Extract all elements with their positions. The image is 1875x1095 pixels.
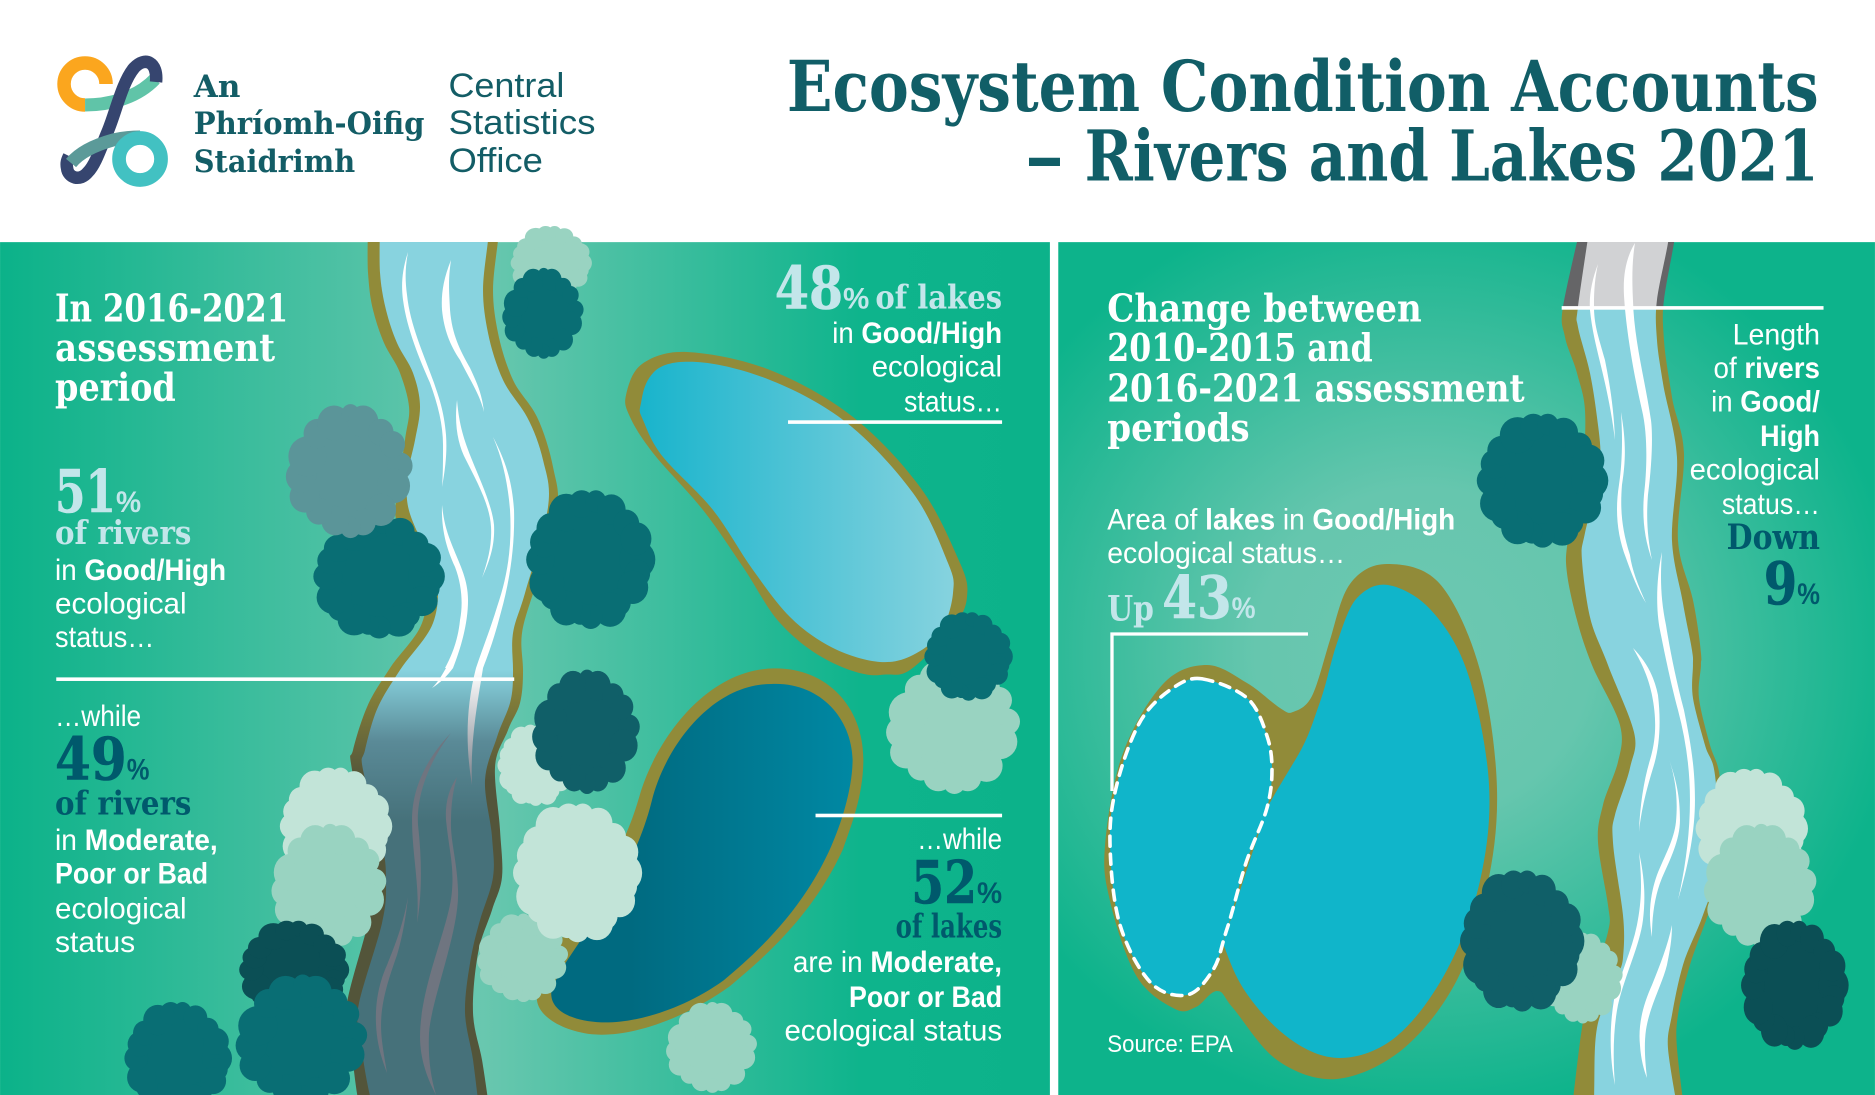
stat: rivers 49%: of rivers [55,784,191,822]
stat: lakes 48%: in Good/High [832,317,1002,350]
stat: rivers down 9%: 9 [1764,549,1797,618]
panel background [0,242,1050,1095]
stat: rivers down 9% [1690,318,1821,618]
stat: lakes 48%: ecological [872,351,1002,384]
river [1562,225,1725,1095]
panel background [1058,242,1875,1095]
stat: rivers 51%: 51 [55,457,116,526]
stat: rivers 49%: …while [55,700,141,733]
stat: lakes 52%: % [977,877,1002,910]
stat: rivers down 9%: Down [1727,517,1820,558]
trees [124,226,1020,1095]
stat: rivers down 9%: Length [1733,318,1820,351]
divider: lakes bottom [816,814,1002,817]
stat: lakes 48%: % [843,282,869,315]
source note: Source: EPA [1107,1031,1233,1058]
stat: rivers down 9%: of rivers [1714,352,1820,385]
heading: assessment period [55,287,288,411]
stat: rivers 51%: in Good/High [55,554,226,587]
stat: lakes up 43%: 43 [1162,563,1232,632]
heading: change between periods: 2010-2015 and [1107,326,1373,371]
stat: lakes up 43%: ecological status… [1107,537,1345,570]
stat: rivers 49%: ecological [55,892,187,925]
heading: change between periods: Change between [1107,287,1422,332]
stat: lakes 48% [775,253,1002,418]
logo: English name [448,67,596,180]
stat: rivers 49%: Poor or Bad [55,858,208,891]
stat: lakes 48%: status… [904,385,1002,418]
stat: lakes up 43% [1107,504,1455,632]
stat: rivers 49%: in Moderate, [55,824,218,857]
stat: lakes 52%: 52 [911,848,977,917]
stat: rivers 51%: of rivers [55,514,191,552]
lake: moderate/poor/bad status [537,668,863,1035]
lake bank [1104,564,1497,1079]
stat: rivers down 9%: status… [1722,488,1820,521]
trees [1460,414,1849,1050]
stat: rivers 51%: ecological [55,587,187,620]
stat: lakes up 43%: Up [1107,589,1154,630]
heading: assessment period: In 2016-2021 [55,287,288,332]
stat: rivers down 9%: High [1760,420,1820,453]
heading: change between periods: 2016-2021 assessment [1107,367,1525,412]
stat: rivers 51%: % [116,486,141,519]
divider: lakes top [788,420,1002,424]
stat: rivers 51% [55,457,226,654]
logo: Irish name: Phríomh-Oifig [194,106,425,142]
larger current lake [1223,585,1489,1058]
stat: lakes up 43%: % [1232,592,1256,625]
stat: lakes 48%: 48 [775,253,843,322]
stat: lakes up 43%: Area of lakes in Good/High [1107,504,1455,537]
stat: rivers down 9%: in Good/ [1711,385,1821,418]
logo: English name: Central [448,67,564,105]
heading: assessment period: assessment [55,326,275,371]
earlier lake area dashed [1110,678,1272,996]
stat: lakes 52%: ecological status [784,1014,1002,1047]
logo: Irish name [193,69,425,180]
stat: rivers 49%: % [127,754,150,787]
stat: rivers 49%: status [55,926,135,959]
river [346,225,558,1095]
panel: 2016-2021 assessment [0,225,1050,1095]
stat: rivers down 9%: % [1797,578,1820,611]
icon: logo knot [64,62,161,180]
stat: lakes 52%: are in Moderate, [793,946,1002,979]
header: logo [64,62,596,180]
logo: Irish name: Staidrimh [194,144,355,180]
logo: English name: Statistics [448,104,596,142]
divider: rivers [56,677,514,681]
river ripples [1590,243,1695,1085]
stat: lakes 52%: …while [917,823,1002,856]
lake: good/high status [625,352,967,675]
river ripples [376,252,514,1095]
callout line [1112,634,1308,791]
panel: change between periods [1058,225,1875,1095]
logo: Irish name: An [193,69,240,105]
stat: rivers down 9%: ecological [1690,453,1820,486]
stat: rivers 49%: 49 [55,725,127,794]
lake: combined outline and areas [1104,564,1497,1079]
stat: lakes 52% [784,823,1002,1047]
title [787,45,1819,198]
heading: change between periods: periods [1107,406,1250,451]
stat: rivers 49% [55,700,218,959]
title: – [1025,115,1064,198]
stat: lakes 52%: Poor or Bad [849,981,1002,1014]
heading: assessment period: period [55,366,176,411]
stat: lakes 52%: of lakes [896,907,1002,945]
logo: English name: Office [448,142,543,180]
stat: lakes 48%: of lakes [875,278,1002,316]
stat: rivers 51%: status… [55,621,154,654]
heading: change between periods [1107,287,1525,451]
divider: rivers length [1562,306,1824,310]
